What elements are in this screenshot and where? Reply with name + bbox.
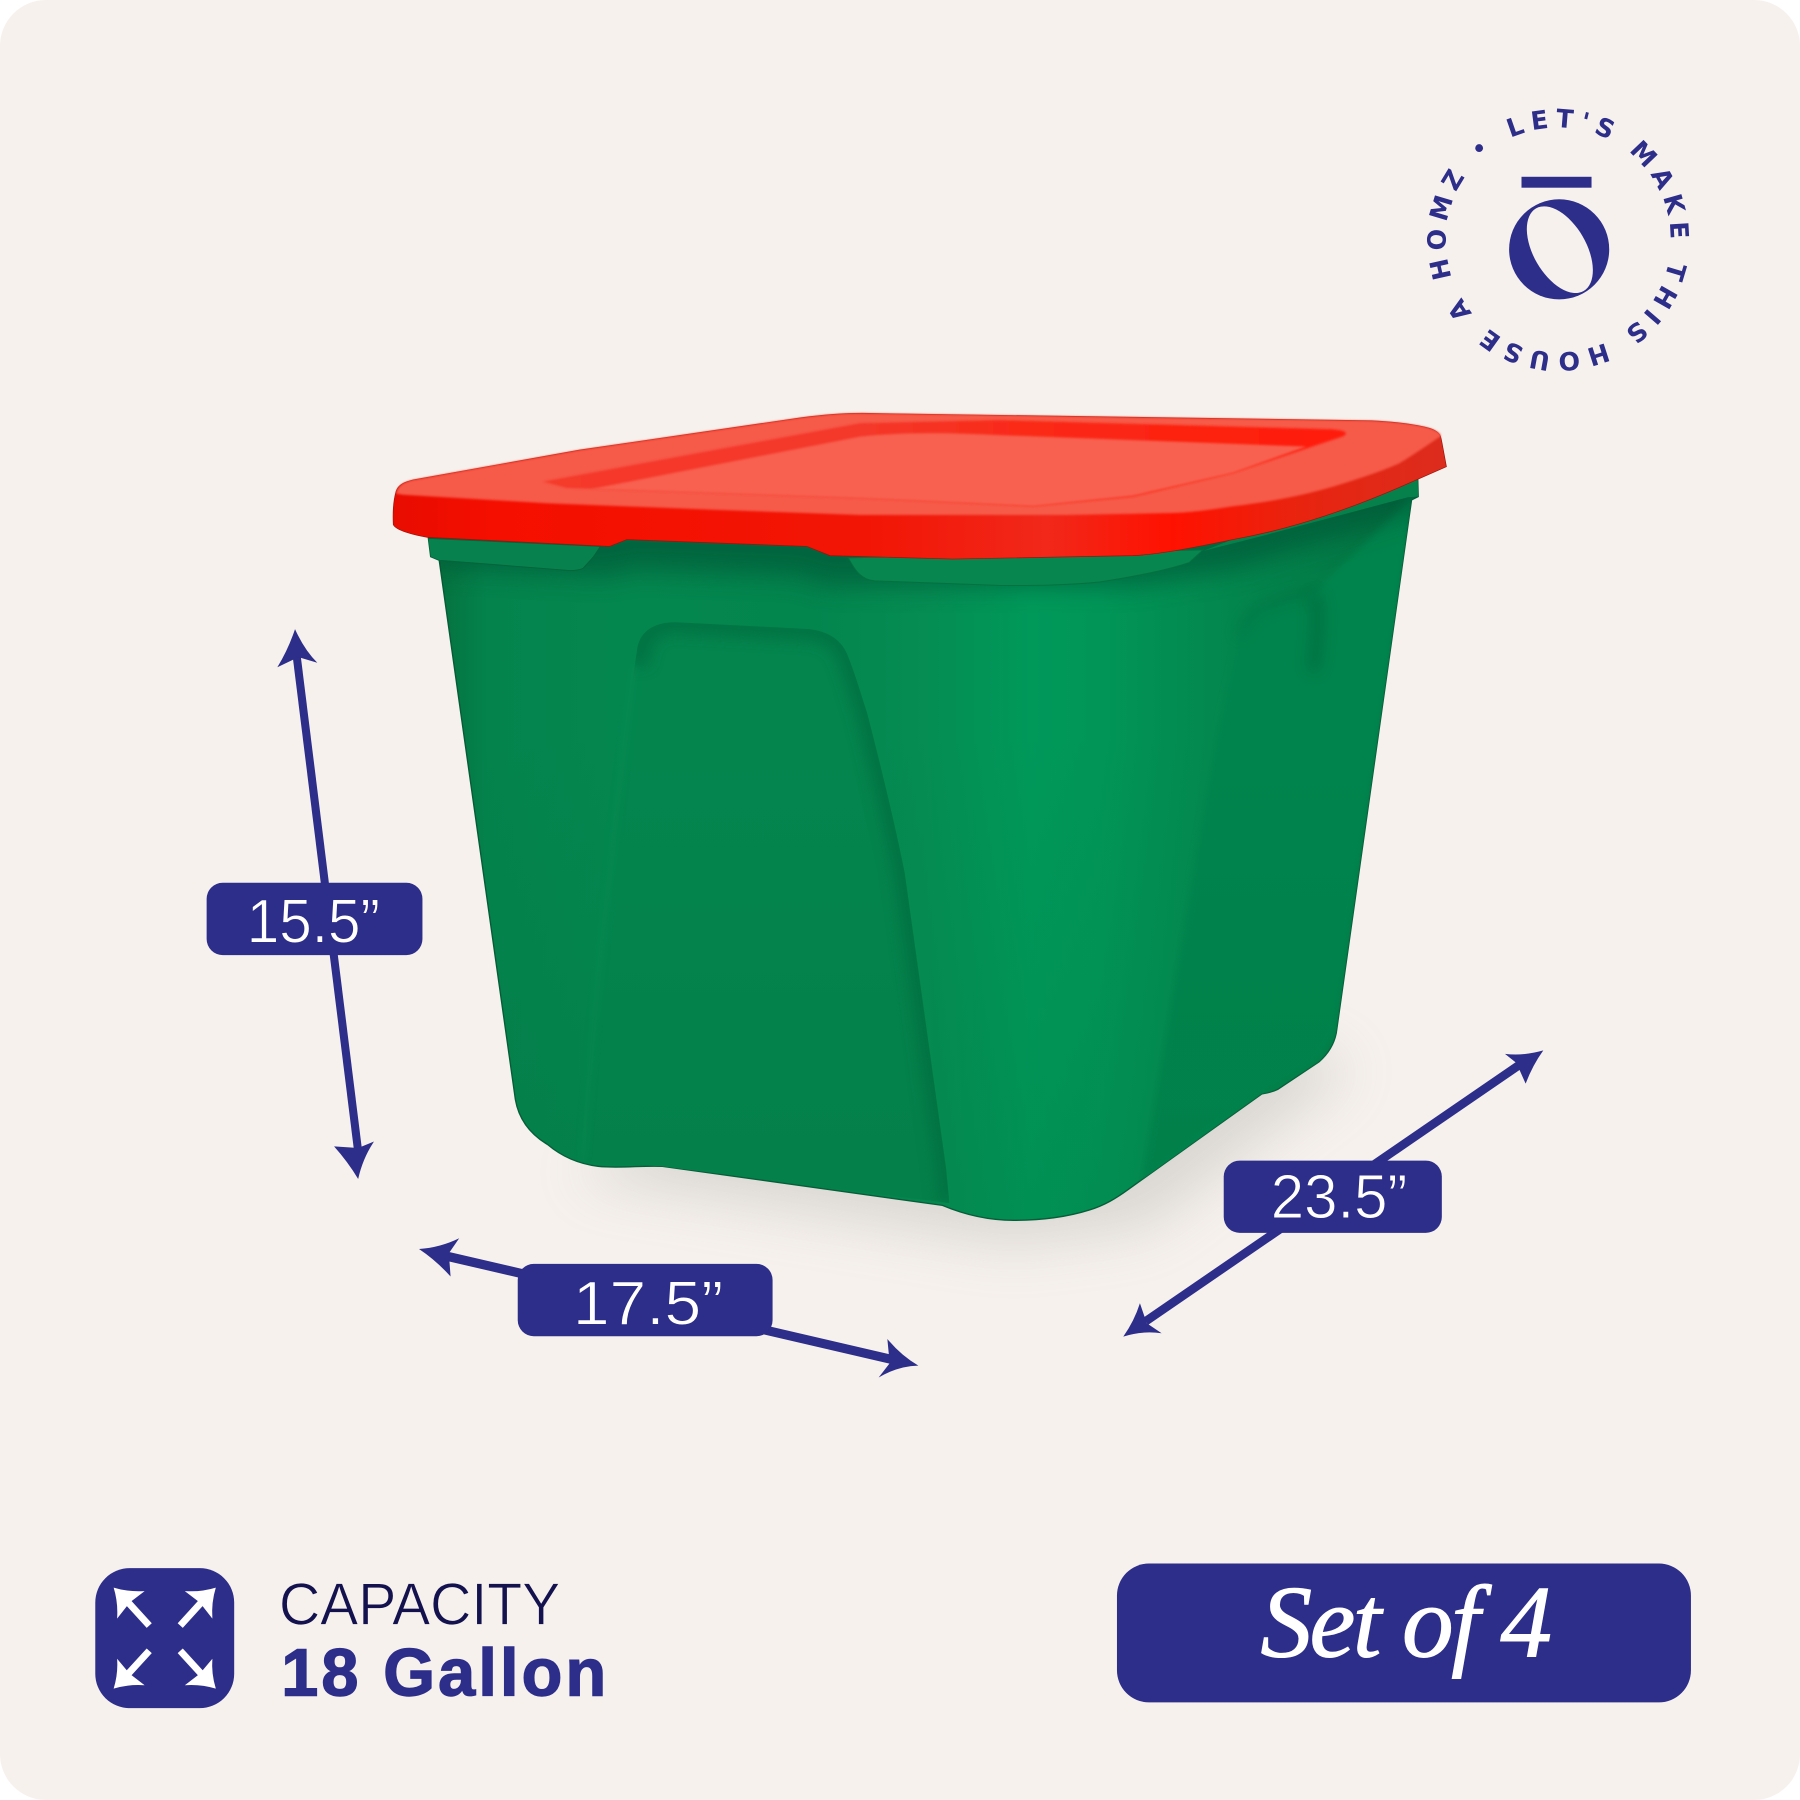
capacity label: CAPACITY bbox=[279, 1570, 560, 1637]
lid recess band bbox=[543, 420, 1346, 506]
dimension: depth 23.5 bbox=[1123, 1050, 1543, 1337]
lid top rim bbox=[396, 413, 1441, 515]
rim ledge centre bbox=[848, 550, 1203, 585]
label pill: 15.5 bbox=[207, 883, 422, 956]
capacity value: 18 Gallon bbox=[281, 1637, 606, 1711]
set of 4 badge: Set of 4 bbox=[1260, 1566, 1552, 1680]
label pill: 17.5: 17.5” bbox=[573, 1270, 723, 1339]
circular slogan: LET'S MAKE THIS HOUSE A HOMZ bbox=[1426, 108, 1690, 371]
rim ledge left bbox=[428, 538, 600, 571]
set of 4 badge bbox=[1117, 1564, 1691, 1702]
left handle recess bbox=[634, 622, 949, 1203]
dimension: height 15.5 bbox=[207, 629, 422, 1179]
capacity block bbox=[95, 1568, 606, 1711]
lid outer shape bbox=[393, 413, 1446, 559]
floor shadow bbox=[574, 1033, 1355, 1246]
icon: expand arrows bbox=[95, 1568, 234, 1708]
red lid bbox=[393, 413, 1446, 559]
shade at bin base bbox=[995, 1170, 1098, 1220]
storage bin bbox=[393, 413, 1446, 1246]
arrow: height bbox=[277, 629, 374, 1179]
label pill: 23.5 bbox=[1224, 1161, 1442, 1233]
arrow: width bbox=[419, 1238, 918, 1378]
label pill: 17.5 bbox=[518, 1264, 773, 1339]
dimension: width 17.5 bbox=[419, 1238, 918, 1378]
left recess edge highlight bbox=[583, 666, 635, 1159]
brand badge bbox=[1426, 108, 1690, 371]
lid centre panel bbox=[591, 433, 1306, 506]
bin body bbox=[425, 480, 1435, 1228]
logo ring bbox=[1509, 195, 1609, 304]
rim ledge right bbox=[1203, 480, 1418, 551]
shade under lid bbox=[428, 484, 1417, 560]
arrow: depth bbox=[1123, 1050, 1543, 1337]
right handle recess bbox=[1141, 494, 1414, 1185]
label pill: 23.5: 23.5” bbox=[1271, 1163, 1407, 1232]
label pill: 15.5: 15.5” bbox=[247, 887, 380, 956]
logo bar bbox=[1522, 177, 1592, 188]
